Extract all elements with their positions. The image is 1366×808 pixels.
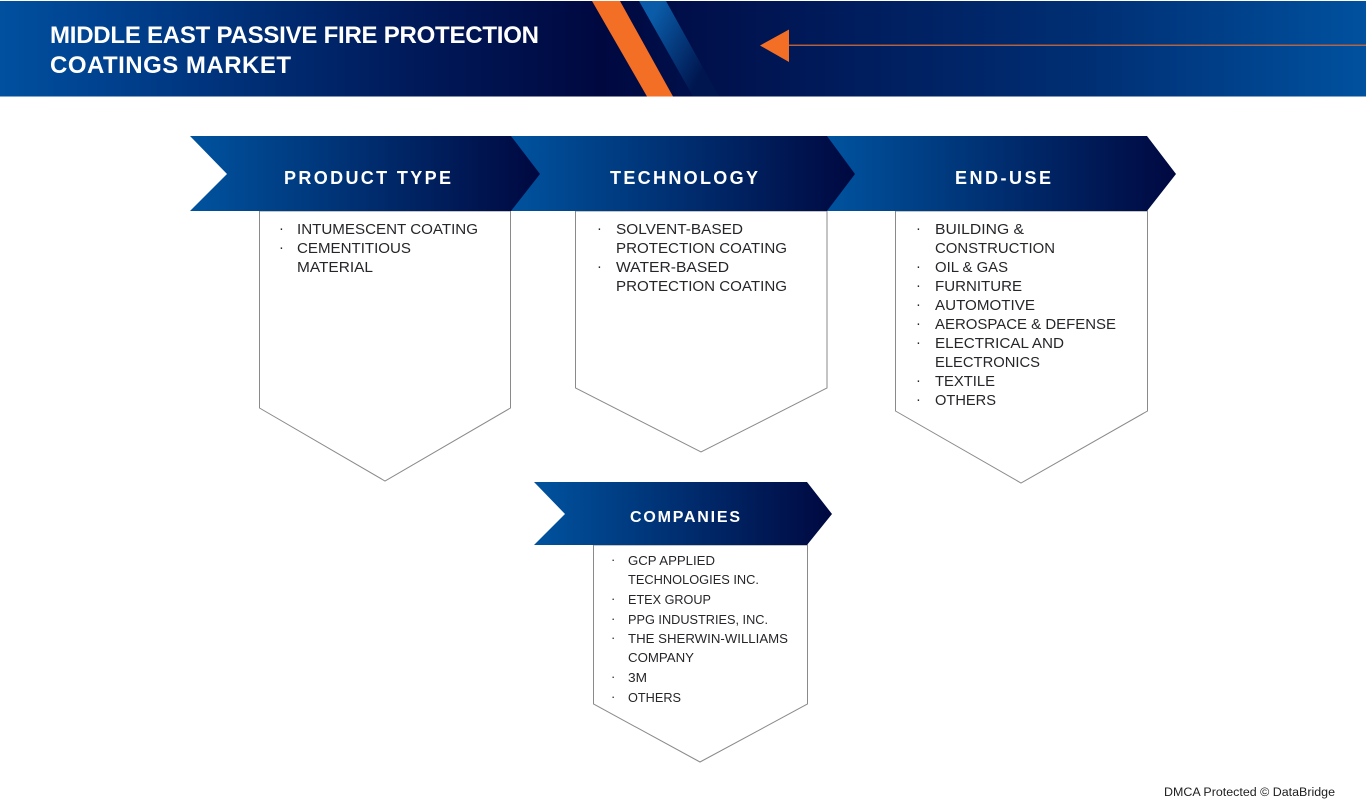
footer credit: DMCA Protected © DataBridge: [1164, 787, 1335, 799]
end-use items: CONSTRUCTION: [935, 241, 1055, 257]
companies list box: [594, 545, 808, 762]
companies items: ·: [611, 630, 615, 645]
companies heading: COMPANIES: [630, 509, 740, 526]
end-use items: ELECTRONICS: [935, 355, 1040, 371]
companies items: OTHERS: [628, 690, 681, 705]
technology items: PROTECTION COATING: [616, 279, 787, 295]
companies items: ETEX GROUP: [628, 592, 711, 607]
companies items: 3M: [628, 670, 647, 685]
end-use header arrow: [827, 136, 1176, 211]
end-use items: ·: [916, 335, 921, 351]
product type items: ·: [279, 221, 284, 237]
technology list box: [576, 211, 827, 452]
technology items: SOLVENT-BASED: [616, 222, 743, 238]
panel: technology: [511, 136, 855, 452]
end-use heading: END-USE: [955, 168, 1051, 188]
technology header arrow: [511, 136, 855, 211]
companies items: ·: [611, 611, 615, 626]
title: COATINGS MARKET: [50, 52, 291, 79]
product type header arrow: [190, 136, 540, 211]
technology items: ·: [597, 259, 602, 275]
companies items: ·: [611, 591, 615, 606]
companies items: PPG INDUSTRIES, INC.: [628, 612, 768, 627]
product type items: INTUMESCENT COATING: [297, 222, 478, 238]
end-use items: [916, 221, 1116, 409]
end-use items: AUTOMOTIVE: [935, 298, 1035, 314]
end-use items: AEROSPACE & DEFENSE: [935, 317, 1116, 333]
end-use items: ·: [916, 373, 921, 389]
end-use items: OTHERS: [935, 393, 996, 409]
end-use items: ELECTRICAL AND: [935, 336, 1064, 352]
end-use items: BUILDING &: [935, 222, 1024, 238]
technology items: [597, 221, 787, 295]
panel: end-use: [827, 136, 1176, 483]
decorative blue stripe: [639, 1, 719, 96]
end-use items: FURNITURE: [935, 279, 1022, 295]
companies items: ·: [611, 689, 615, 704]
end-use items: ·: [916, 392, 921, 408]
product type items: [279, 221, 478, 276]
companies items: ·: [611, 669, 615, 684]
product type items: ·: [279, 240, 284, 256]
end-use list box: [896, 211, 1148, 483]
companies items: COMPANY: [628, 650, 694, 665]
end-use items: ·: [916, 259, 921, 275]
companies items: GCP APPLIED: [628, 553, 715, 568]
companies items: ·: [611, 552, 615, 567]
end-use items: ·: [916, 221, 921, 237]
product type list box: [260, 211, 510, 481]
end-use items: OIL & GAS: [935, 260, 1008, 276]
end-use items: ·: [916, 297, 921, 313]
product type heading: PRODUCT TYPE: [284, 168, 451, 188]
technology items: WATER-BASED: [616, 260, 729, 276]
technology items: PROTECTION COATING: [616, 241, 787, 257]
technology heading: TECHNOLOGY: [610, 168, 758, 188]
panel: companies: [534, 482, 832, 762]
companies header arrow: [534, 482, 832, 545]
end-use items: ·: [916, 316, 921, 332]
product type items: MATERIAL: [297, 260, 373, 276]
technology items: ·: [597, 221, 602, 237]
companies items: [611, 552, 788, 705]
product type items: CEMENTITIOUS: [297, 241, 411, 257]
panel: product type: [190, 136, 540, 481]
title: [50, 22, 539, 79]
decorative orange stripe: [592, 1, 673, 96]
header banner: [0, 1, 1366, 96]
end-use items: ·: [916, 278, 921, 294]
companies items: THE SHERWIN-WILLIAMS: [628, 631, 788, 646]
arrow pointing left: [760, 30, 1366, 62]
title: MIDDLE EAST PASSIVE FIRE PROTECTION: [50, 22, 539, 49]
companies items: TECHNOLOGIES INC.: [628, 572, 759, 587]
end-use items: TEXTILE: [935, 374, 995, 390]
